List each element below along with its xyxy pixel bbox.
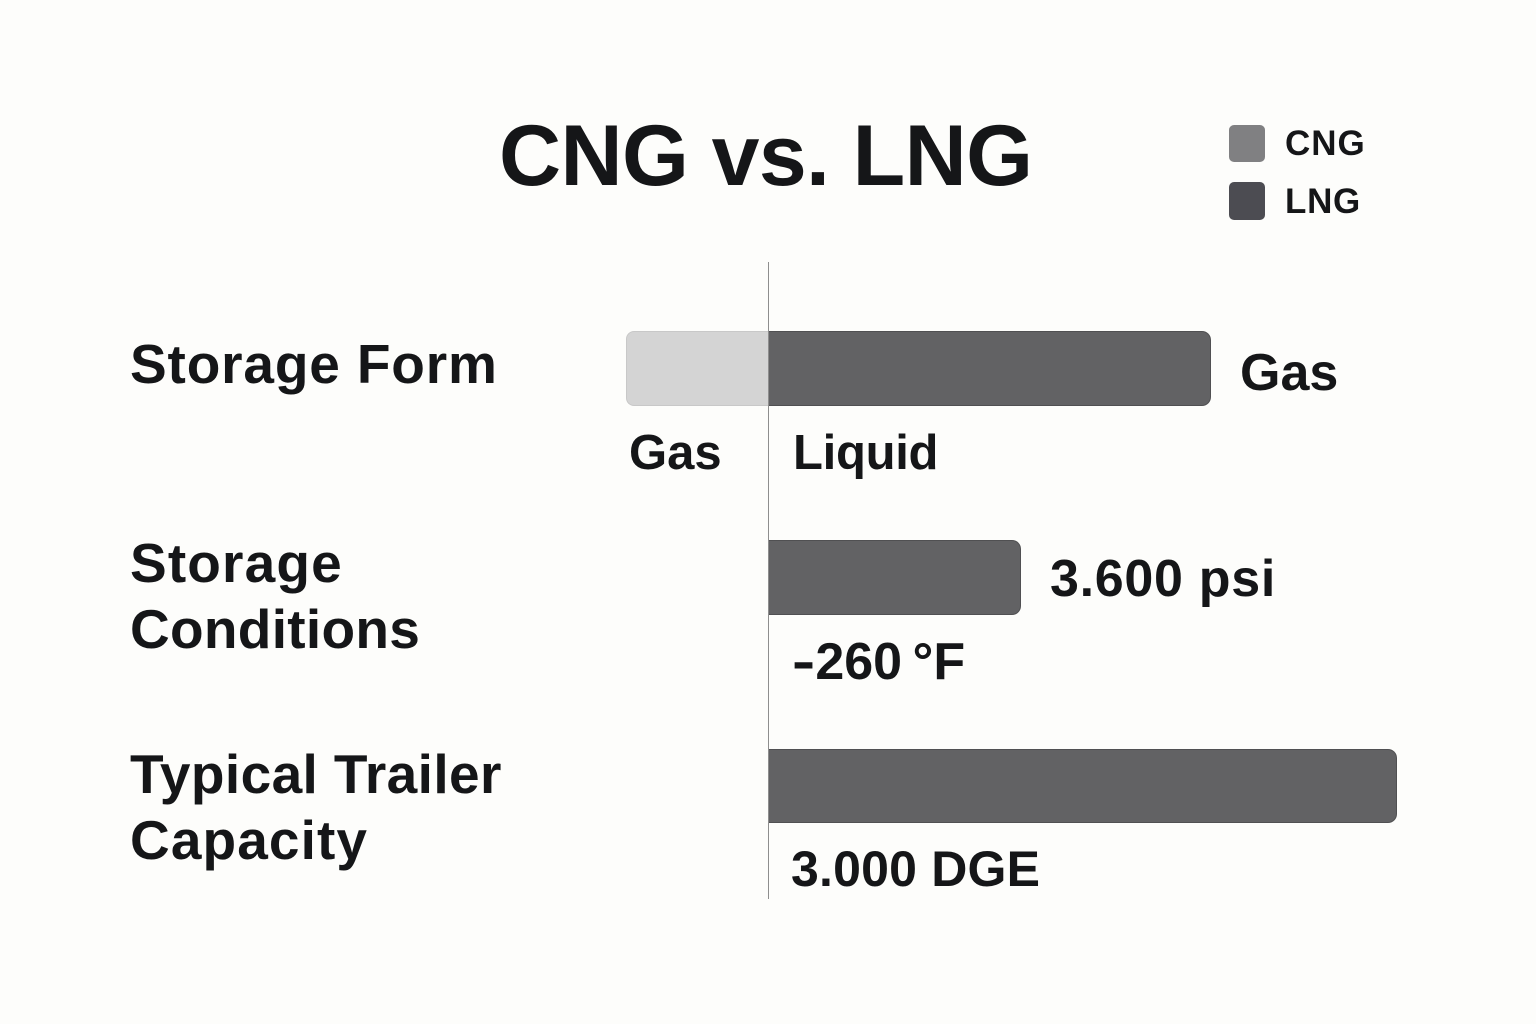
legend label: LNG: LNG — [1285, 182, 1361, 221]
value: Gas (CNG): Gas — [629, 426, 722, 480]
bar: storage conditions — [769, 540, 1021, 615]
row label: Typical Trailer Capacity — [130, 743, 502, 871]
bar: trailer capacity — [769, 749, 1397, 823]
value: Gas (right): Gas — [1240, 344, 1338, 402]
bar: LNG storage form — [769, 331, 1211, 406]
legend swatch: CNG — [1229, 125, 1265, 162]
legend label: CNG: CNG — [1285, 124, 1366, 163]
legend swatch: LNG — [1229, 182, 1265, 220]
value: 3.600 psi: 3.600 psi — [1050, 550, 1276, 608]
title: CNG vs. LNG — [499, 108, 1032, 204]
row label: Storage Form: Storage Form — [130, 333, 498, 395]
row label: Typical Trailer Capacity: Typical Trailer — [130, 743, 502, 805]
row label: Storage Conditions: Storage — [130, 532, 343, 594]
row label: Typical Trailer Capacity: Capacity — [130, 809, 368, 871]
axis line — [768, 262, 769, 899]
value: -260 °F: - — [792, 633, 815, 691]
value: Liquid: Liquid — [793, 426, 938, 480]
value: -260 °F: 260 °F — [815, 633, 965, 691]
row label: Storage Conditions — [130, 532, 420, 660]
bar: CNG storage form — [626, 331, 769, 406]
legend — [1229, 124, 1366, 221]
value: 3.000 DGE: 3.000 DGE — [791, 841, 1040, 897]
row label: Storage Conditions: Conditions — [130, 598, 420, 660]
